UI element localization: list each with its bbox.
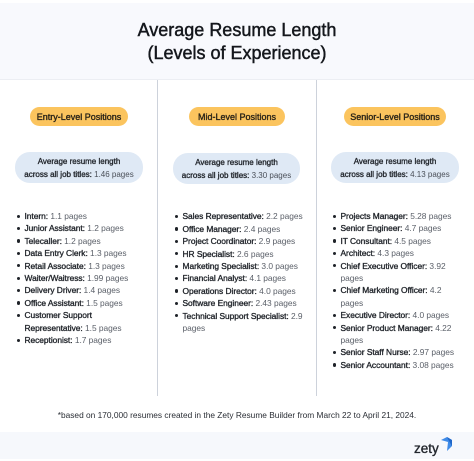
list: entry-level positions: Retail Associate: 1.3 pages xyxy=(24,261,125,271)
callout: entry-level average: across all job titles: 1.46 pages xyxy=(24,170,134,179)
list: senior-level positions: Senior Engineer: 4.7 pages xyxy=(340,223,441,233)
heading: mid-level: Mid-Level Positions xyxy=(198,112,276,122)
column divider left xyxy=(157,80,158,396)
list: entry-level positions: Waiter/Waitress: 1.99 pages xyxy=(24,273,128,283)
title xyxy=(137,20,336,64)
list: mid-level positions: Financial Analyst: 4.1 pages xyxy=(182,273,286,283)
list: senior-level positions: Senior Product Manager: 4.22 xyxy=(340,323,451,333)
callout: mid-level average: Average resume length xyxy=(195,158,278,167)
list: mid-level positions: Sales Representative: 2.2 pages xyxy=(182,211,303,221)
panel: entry-level xyxy=(0,80,157,396)
title: (Levels of Experience) xyxy=(147,42,327,62)
callout: mid-level average xyxy=(173,153,300,184)
list: mid-level positions: Software Engineer: 2.43 pages xyxy=(182,298,297,308)
list: mid-level positions: pages xyxy=(182,323,205,333)
list: senior-level positions: Chief Executive Officer: 3.92 xyxy=(340,261,446,271)
list: entry-level positions xyxy=(17,211,128,345)
list: senior-level positions: Executive Director: 4.0 pages xyxy=(340,310,449,320)
callout: senior-level average: across all job titles: 4.13 pages xyxy=(340,170,450,179)
list: senior-level positions: Senior Accountant: 3.08 pages xyxy=(340,360,454,370)
list: entry-level positions: Telecaller: 1.2 pages xyxy=(24,236,101,246)
list: senior-level positions: pages xyxy=(340,335,363,345)
list: entry-level positions: Receptionist: 1.7 pages xyxy=(24,335,111,345)
list: entry-level positions: Representative: 1.5 pages xyxy=(24,323,122,333)
heading: mid-level xyxy=(189,107,285,126)
list: entry-level positions: Office Assistant: 1.5 pages xyxy=(24,298,123,308)
footer band xyxy=(0,432,474,459)
list: senior-level positions: pages xyxy=(340,298,363,308)
callout: entry-level average xyxy=(15,152,143,183)
title: Average Resume Length xyxy=(138,20,336,40)
list: entry-level positions: Intern: 1.1 pages xyxy=(24,211,87,221)
list: senior-level positions xyxy=(333,211,454,370)
list: entry-level positions: Delivery Driver: 1.4 pages xyxy=(24,285,120,295)
heading: senior-level: Senior-Level Positions xyxy=(350,112,440,122)
list: entry-level positions: Data Entry Clerk: 1.3 pages xyxy=(24,248,127,258)
logo wordmark: zety xyxy=(414,441,439,456)
callout: senior-level average: Average resume length xyxy=(354,157,436,166)
header band xyxy=(0,3,474,80)
list: mid-level positions: Project Coordinator: 2.9 pages xyxy=(182,236,295,246)
callout: mid-level average: across all job titles: 3.30 pages xyxy=(182,171,291,180)
list: senior-level positions: Architect: 4.3 pages xyxy=(340,248,414,258)
list: mid-level positions: Office Manager: 2.4 pages xyxy=(182,224,280,234)
heading: entry-level xyxy=(30,107,128,126)
list: senior-level positions: IT Consultant: 4.5 pages xyxy=(340,236,431,246)
list: mid-level positions: Technical Support Specialist: 2.9 xyxy=(182,311,303,321)
list: entry-level positions: Junior Assistant: 1.2 pages xyxy=(24,223,124,233)
list: senior-level positions: Chief Marketing Officer: 4.2 xyxy=(340,285,441,295)
callout: senior-level average xyxy=(331,152,459,183)
list: senior-level positions: pages xyxy=(340,273,363,283)
list: mid-level positions: Marketing Specialist: 3.0 pages xyxy=(182,261,298,271)
list: mid-level positions: HR Specialist: 2.6 pages xyxy=(182,249,274,259)
heading: senior-level xyxy=(344,107,446,126)
icon: zety logo mark xyxy=(441,437,452,451)
heading: entry-level: Entry-Level Positions xyxy=(37,112,121,122)
list: senior-level positions: Projects Manager: 5.28 pages xyxy=(340,211,451,221)
column divider right xyxy=(316,80,317,396)
list: entry-level positions: Customer Support xyxy=(24,310,92,320)
footnote: *based on 170,000 resumes created in the Zety Resume Builder from March 22 to April 21, 2024. xyxy=(58,410,416,420)
list: mid-level positions xyxy=(175,211,303,333)
list: senior-level positions: Senior Staff Nurse: 2.97 pages xyxy=(340,347,454,357)
list: mid-level positions: Operations Director: 4.0 pages xyxy=(182,286,296,296)
callout: entry-level average: Average resume length xyxy=(38,157,120,166)
